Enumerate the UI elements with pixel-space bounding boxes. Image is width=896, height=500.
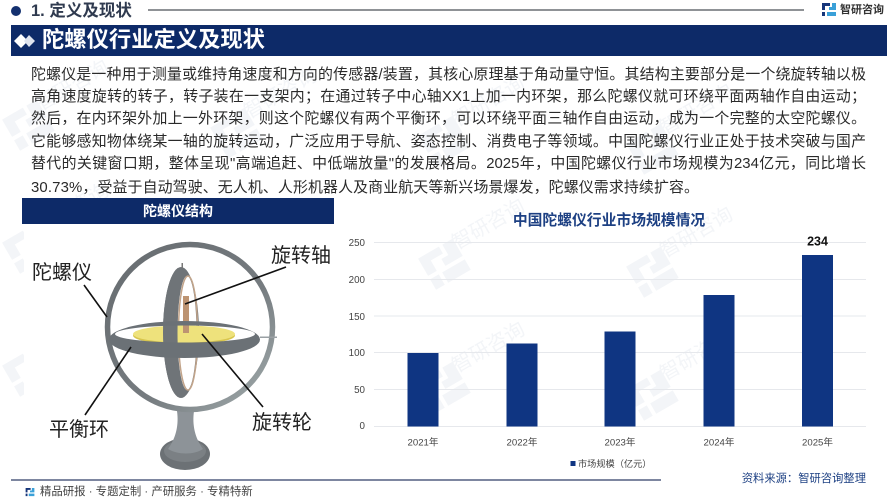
label: 旋转轮 (202, 334, 312, 434)
value label: 234 (807, 234, 828, 248)
panel: gyroscope structure header (22, 198, 334, 224)
y axis: 150 (349, 312, 366, 323)
axle (183, 296, 189, 333)
y axis: 50 (354, 385, 366, 396)
footer slogan: 精品研报 · 专题定制 · 产研服务 · 专精特新 (40, 486, 253, 498)
label: 旋转轴: 旋转轴 (271, 244, 331, 267)
x axis (408, 436, 833, 448)
watermark pattern: 智研咨询 (448, 317, 529, 377)
watermark pattern: 智研咨询 (656, 202, 737, 262)
label: 陀螺仪 (32, 261, 107, 317)
body text: 高角速度旋转的转子，转子装在一支架内；在通过转子中心轴XX1上加一内环架，那么陀螺仪就可环绕平面两轴作自由运动； (31, 89, 866, 105)
title: 陀螺仪行业定义及现状 (42, 27, 265, 52)
icon: stand (160, 411, 210, 470)
y axis: 0 (360, 421, 366, 432)
y axis: 100 (349, 348, 366, 359)
label: 陀螺仪: 陀螺仪 (32, 261, 92, 284)
label: 旋转轴 (185, 244, 331, 304)
label: 平衡环: 平衡环 (49, 418, 109, 441)
x axis: 2021年 (408, 436, 439, 448)
inner ring (163, 263, 199, 398)
chart title: 中国陀螺仪行业市场规模情况 (513, 211, 705, 229)
watermark pattern: 智研咨询 (32, 301, 113, 361)
watermark pattern: 智研咨询 (32, 178, 113, 238)
rotor disc (133, 326, 235, 344)
legend: 市场规模（亿元） (578, 458, 652, 469)
y axis: 250 (349, 238, 366, 249)
body text: 它能够感知物体绕某一轴的旋转运动，广泛应用于导航、姿态控制、消费电子等领域。中国陀螺仪行业正处于技术突破与国产 (31, 134, 866, 150)
body text (31, 66, 866, 196)
x axis: 2025年 (802, 436, 833, 448)
y axis (349, 238, 366, 432)
chart: market size (349, 211, 866, 469)
x axis: 2022年 (507, 436, 538, 448)
body text: 陀螺仪是一种用于测量或维持角速度和方向的传感器/装置，其核心原理基于角动量守恒。其结构主要部分是一个绕旋转轴以极 (31, 67, 866, 83)
icon: diamonds (14, 34, 35, 48)
x axis: 2023年 (605, 436, 636, 448)
bars (408, 255, 833, 426)
watermark pattern: 智研咨询 (448, 194, 529, 254)
heading rule (148, 9, 804, 11)
panel: gyroscope structure header: 陀螺仪结构 (143, 203, 213, 219)
source: 资料来源：智研咨询整理 (742, 473, 866, 485)
watermark pattern: 智研咨询 (656, 79, 737, 139)
logo: 智研咨询 (840, 4, 884, 16)
outer ring (108, 244, 272, 410)
footer rule (11, 479, 661, 480)
logo (822, 3, 884, 16)
section heading: 1. 定义及现状 (31, 2, 132, 20)
label: 旋转轮: 旋转轮 (252, 411, 312, 434)
x axis: 2024年 (704, 436, 735, 448)
watermark pattern: 智研咨询 (32, 55, 113, 115)
watermark pattern: 智研咨询 (656, 325, 737, 385)
watermark pattern: 智研咨询 (240, 63, 321, 123)
body text: 替代的关键窗口期，整体呈现"高端追赶、中低端放量"的发展格局。2025年，中国陀螺仪行业市场规模为234亿元，同比增长 (31, 156, 866, 172)
y axis: 200 (349, 275, 366, 286)
balance ring (109, 321, 277, 358)
body text: 30.73%，受益于自动驾驶、无人机、人形机器人及商业航天等新兴场景爆发，陀螺仪需求持续扩容。 (31, 180, 699, 196)
watermark pattern: 智研咨询 (448, 71, 529, 131)
title banner (11, 25, 887, 56)
diagram: gyroscope structure (32, 242, 331, 470)
inner ring front band (163, 268, 178, 397)
label: 平衡环 (49, 347, 131, 441)
body text: 然后，在内环架外加上一外环架，则这个陀螺仪有两个平衡环，可以环绕平面三轴作自由运动，成为一个完整的太空陀螺仪。 (31, 111, 866, 127)
